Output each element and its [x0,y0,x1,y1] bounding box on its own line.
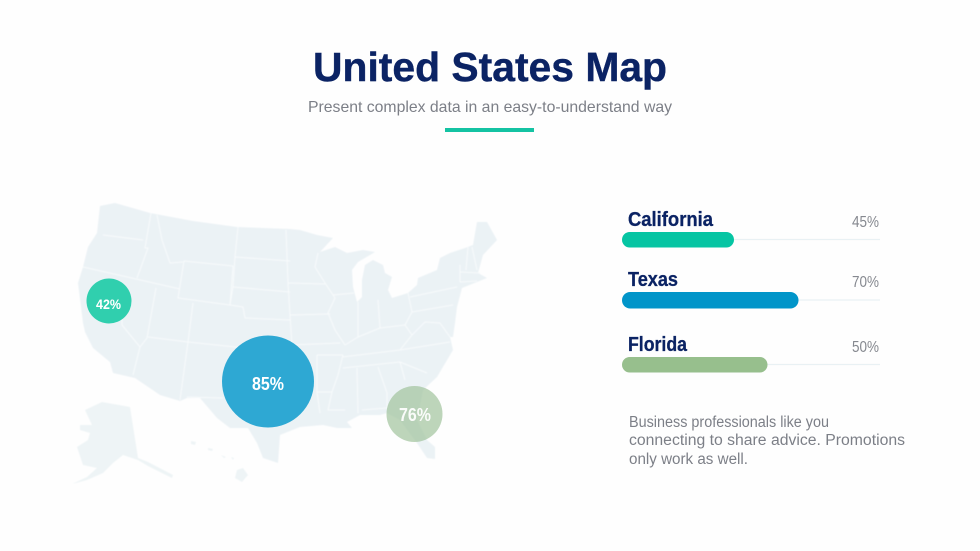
label: Florida: Florida [628,334,688,356]
row: Texas [622,269,880,308]
description text: Business professionals like you [629,414,829,431]
map: Hawaii [191,441,248,482]
bubble: Texas 85%: 85% [252,374,284,394]
label: California: California [628,209,714,231]
row: California [622,209,880,248]
bubble: California 42% [86,278,132,324]
map: state borders [83,213,480,413]
description text [629,414,905,468]
bubble: Florida 76% [386,386,442,442]
bar: Florida 50% [622,357,768,372]
map: contiguous states [78,203,497,463]
label: Texas: Texas [628,269,678,291]
map: United States [72,203,497,484]
bar: California 45% [622,232,734,248]
value: 70%: 70% [852,274,879,291]
description text: connecting to share advice. Promotions [629,432,905,449]
title underline [445,128,534,132]
bubble: California 42%: 42% [96,296,121,312]
bubble: Texas 85% [222,336,314,428]
value: 45%: 45% [852,214,879,231]
subtitle: Present complex data in an easy-to-understand way [308,99,672,116]
description text: only work as well. [629,451,748,468]
bar: Texas 70% [622,292,798,308]
value: 50%: 50% [852,339,879,356]
bubble: Florida 76%: 76% [399,405,431,425]
row: Florida [622,334,880,372]
title: United States Map [313,44,667,90]
map: Alaska [72,402,173,484]
